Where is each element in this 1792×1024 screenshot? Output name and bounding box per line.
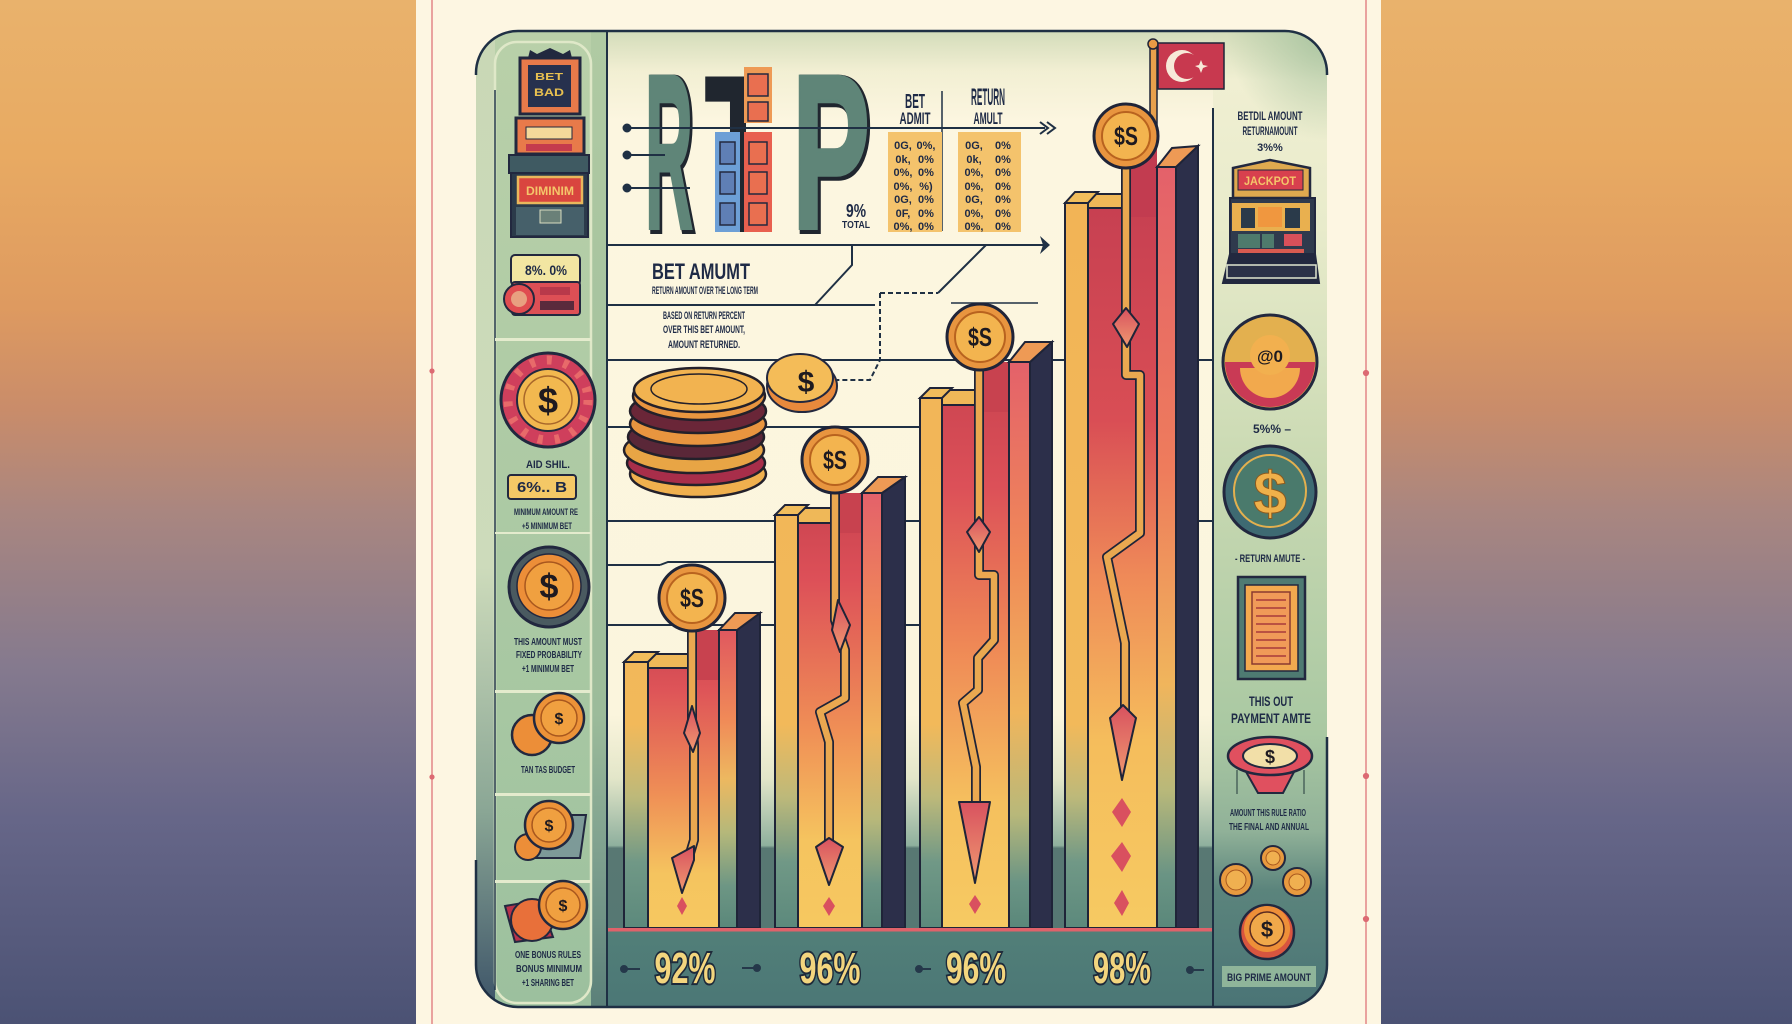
title: RTP letters: P <box>794 31 872 277</box>
sidebar dividers <box>607 31 1213 1007</box>
bet amount column: ADMIT <box>900 109 931 128</box>
icon: cash register machine: JACKPOT <box>1244 174 1297 188</box>
small diamonds under arrows <box>677 798 1131 916</box>
return amount column: 0G, <box>965 194 983 206</box>
return amount column: 0% <box>995 154 1011 166</box>
return amount column: 0k, <box>966 154 982 166</box>
icon: coin and card: $ <box>545 818 554 835</box>
icon: large coin <box>1240 905 1294 959</box>
coin 4 on stem <box>1094 104 1158 168</box>
text: card caption: +1 SHARING BET <box>522 978 574 989</box>
text: caption: MINIMUM AMOUNT RE <box>514 507 578 517</box>
icon: coins and red card <box>505 881 587 942</box>
icon: slot machine <box>509 48 589 237</box>
bet amount column: 0% <box>918 167 934 179</box>
back coin: $ <box>798 366 815 399</box>
bet amount column: 0% <box>918 194 934 206</box>
percentage labels: 96% <box>946 944 1006 993</box>
bet amount column: 0% <box>918 221 934 233</box>
frame outline <box>476 31 1327 1007</box>
paper sheet <box>416 0 1381 1024</box>
text: top caption: BETDIL AMOUNT <box>1238 109 1303 123</box>
percentage labels: 92% <box>654 944 716 993</box>
bet amount column: 0G, <box>894 194 912 206</box>
text: return amount label: - RETURN AMUTE - <box>1235 553 1305 565</box>
right sidebar <box>1220 109 1319 987</box>
coin 3 on stem: $S <box>968 322 992 352</box>
title colour blocks in T <box>715 67 772 232</box>
icon: split chip <box>1223 315 1317 409</box>
return amount column: 0%, <box>965 208 983 220</box>
icon: dollar badge: $ <box>1253 460 1287 527</box>
coin 2 on stem <box>802 427 868 493</box>
bar 2 <box>775 477 905 928</box>
text: card caption: ONE BONUS RULES <box>515 950 581 961</box>
bet amount column: 0% <box>918 208 934 220</box>
text: coin caption <box>514 637 582 675</box>
icon: dollar coin <box>509 547 589 627</box>
text: coins caption: TAN TAS BUDGET <box>521 765 575 776</box>
percentage labels <box>654 944 1151 993</box>
background gradient right <box>1378 0 1792 1024</box>
return amount column: 0% <box>995 140 1011 152</box>
icon: dollar badge <box>1224 446 1316 538</box>
back coin <box>767 354 837 412</box>
icon: payout bowl: $ <box>1265 747 1275 767</box>
arrow 1: falling return line <box>672 625 700 893</box>
coin 2 on stem: $S <box>823 445 847 475</box>
coin 4 on stem: $S <box>1114 121 1138 151</box>
arrowhead on guide line <box>1040 236 1050 254</box>
bet amount column <box>888 91 942 233</box>
text: bowl caption: AMOUNT THIS RULE RATIO <box>1230 808 1306 819</box>
text: document caption <box>1231 693 1311 726</box>
bet amount column: BET <box>905 91 925 113</box>
arrow 3: falling return line <box>959 370 994 883</box>
label box: BIG PRIME AMOUNT <box>1227 972 1311 984</box>
title: RTP letters: P <box>792 29 870 275</box>
bet amount column: 0k, <box>895 154 911 166</box>
pink border line right <box>1364 0 1368 1024</box>
return amount column: 0% <box>995 208 1011 220</box>
callout lines with arrow <box>624 91 1055 231</box>
icon: bet ticket <box>504 255 580 315</box>
label box <box>1222 966 1316 987</box>
icon: cash register machine <box>1223 160 1319 283</box>
return amount column: 0% <box>995 221 1011 233</box>
percentage labels: 98% <box>1093 944 1151 993</box>
title: RTP letters: R <box>645 29 693 275</box>
icon: coins and red card: $ <box>559 898 568 915</box>
text: coin caption: +1 MINIMUM BET <box>522 664 574 675</box>
left sidebar <box>495 48 595 989</box>
icon: document <box>1238 577 1305 679</box>
icon: coin and card <box>515 801 586 860</box>
text: card caption: BONUS MINIMUM <box>516 964 582 975</box>
text: coin caption: THIS AMOUNT MUST <box>514 637 582 648</box>
title: RTP letters: T <box>704 27 772 280</box>
text: document caption: PAYMENT AMTE <box>1231 710 1311 726</box>
9% total label <box>842 201 870 231</box>
icon: dollar coin: $ <box>540 568 559 606</box>
icon: slot machine: BET <box>535 72 563 83</box>
return amount column <box>958 84 1021 233</box>
text: top caption: 3%% <box>1257 142 1283 154</box>
text: RETURN AMOUNT OVER THE LONG TERM <box>652 285 758 297</box>
arrow 4: falling return line <box>1107 165 1140 780</box>
9% total label: 9% <box>846 201 866 221</box>
bet amount column: 0% <box>918 154 934 166</box>
bet amount column: 0G, <box>894 140 912 152</box>
bet amount column: %) <box>919 181 933 193</box>
icon: casino chip <box>501 353 595 447</box>
bet amount column: 0F, <box>896 208 910 220</box>
9% total label: TOTAL <box>842 220 870 231</box>
bar 3 <box>920 342 1052 928</box>
icon: large coin: $ <box>1261 917 1273 942</box>
bet amount description <box>663 310 745 351</box>
icon: split chip: @0 <box>1257 347 1283 366</box>
text: card caption <box>515 950 582 989</box>
icon: payout bowl <box>1228 737 1312 794</box>
return amount column: RETURN <box>971 84 1005 111</box>
return amount column: 0% <box>995 167 1011 179</box>
return amount column: 0%, <box>965 221 983 233</box>
icon: casino chip: $ <box>538 380 558 421</box>
bar 4 <box>1065 146 1198 928</box>
icon: small coins <box>1220 846 1311 896</box>
return amount column: 0% <box>995 194 1011 206</box>
text: caption <box>514 507 578 531</box>
text: bowl caption: THE FINAL AND ANNUAL <box>1229 822 1309 833</box>
bar 1 <box>624 613 760 928</box>
return amount column: AMULT <box>974 109 1003 128</box>
main framed panel <box>476 31 1327 1007</box>
text: caption: +5 MINIMUM BET <box>522 521 572 531</box>
text: coin caption: FIXED PROBABILITY <box>516 650 582 661</box>
value box: 6%.. B <box>517 479 567 496</box>
icon: pair of coins: $ <box>555 711 564 728</box>
small tick markers <box>621 965 1204 973</box>
coin 1 on stem: $S <box>680 583 704 613</box>
return amount column: 0%, <box>965 167 983 179</box>
title: RTP letters <box>645 27 872 280</box>
pink border line left <box>430 0 434 1024</box>
coin stack <box>624 368 766 497</box>
icon: slot machine: BAD <box>534 87 564 99</box>
return amount column: 0% <box>995 181 1011 193</box>
text: top caption: RETURNAMOUNT <box>1242 124 1298 138</box>
icon: bet ticket: 8%. 0% <box>525 262 567 278</box>
text: chip label: AID SHIL. <box>526 459 570 471</box>
bet amount column: 0%, <box>894 167 912 179</box>
return amount column: 0%, <box>965 181 983 193</box>
bet amount column: 0%, <box>894 181 912 193</box>
bet amount description: BASED ON RETURN PERCENT <box>663 310 745 322</box>
icon: slot machine: DIMINIM <box>526 184 574 198</box>
bet amount description: OVER THIS BET AMOUNT, <box>663 324 745 336</box>
text: top caption <box>1238 109 1303 154</box>
bet amount column: 0%, <box>917 140 935 152</box>
return amount column: 0G, <box>965 140 983 152</box>
text: bowl caption <box>1229 808 1309 833</box>
coin 3 on stem <box>947 304 1013 370</box>
percentage labels: 96% <box>800 944 860 993</box>
bet amount column: 0%, <box>894 221 912 233</box>
icon: pair of coins <box>512 693 584 755</box>
text: 5% label: 5%% – <box>1253 422 1291 436</box>
bet amount description: AMOUNT RETURNED. <box>668 339 740 351</box>
bet amount heading: BET AMUMT <box>652 259 750 284</box>
arrow 2: falling return line <box>816 490 850 885</box>
text: document caption: THIS OUT <box>1249 693 1293 709</box>
background gradient left <box>0 0 418 1024</box>
flag pole and Turkish flag <box>1148 39 1224 130</box>
chart baseline <box>607 928 1213 932</box>
title: RTP letters: R <box>647 31 695 277</box>
value box <box>508 475 576 499</box>
chart guide lines <box>607 245 1213 625</box>
coin 1 on stem <box>659 565 725 631</box>
